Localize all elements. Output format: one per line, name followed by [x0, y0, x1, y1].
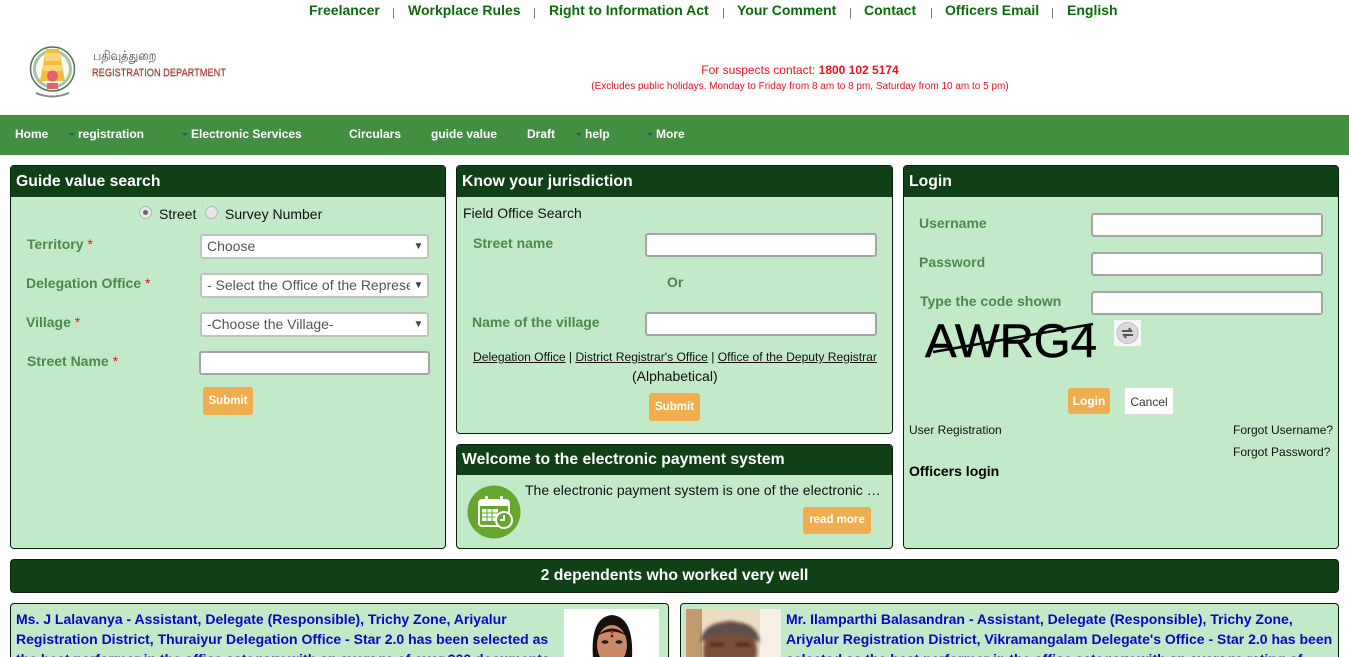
- heading: electronic payment: [457, 445, 892, 475]
- navigation bar: registration: [78, 127, 144, 141]
- top links: [309, 2, 1118, 19]
- text: performer two: Ariyalur Registration District, Vikramangalam Delegate's Office - Star 2.0 has been: [786, 631, 1332, 647]
- panel: electronic payment: The electronic payment system is one of the electronic …: [525, 482, 881, 498]
- button: login: [1068, 388, 1110, 414]
- icon: calendar: [468, 486, 520, 538]
- text: performer two: [786, 611, 1332, 657]
- top links: Officers Email: [945, 2, 1039, 18]
- navigation bar: Draft: [527, 127, 555, 141]
- top links: English: [1067, 2, 1118, 18]
- button: read more: [803, 507, 871, 534]
- radio: street: [139, 206, 152, 219]
- select: delegation office: ▼: [414, 280, 423, 291]
- panel: know your jurisdiction: (Alphabetical): [632, 368, 718, 384]
- top links: |: [849, 7, 852, 19]
- navigation bar: More: [656, 127, 685, 141]
- panel: guide value search: Street Name *: [27, 353, 118, 369]
- panel: guide value search: Survey Number: [225, 206, 322, 222]
- input: street name: [199, 351, 430, 375]
- panel: login: User Registration: [909, 423, 1002, 437]
- panel: login: Forgot Username?: [1233, 423, 1333, 437]
- panel: login: Password: [919, 254, 985, 270]
- button: submit: [203, 387, 253, 415]
- heading: guide value search: Guide value search: [16, 173, 160, 190]
- top links: |: [533, 7, 536, 19]
- button: read more: read more: [809, 514, 865, 526]
- photo: performer one: [564, 609, 659, 657]
- panel: know your jurisdiction: Name of the village: [472, 314, 600, 330]
- panel: performer two: [680, 603, 1339, 657]
- select: territory: [200, 234, 429, 259]
- button: submit: [649, 393, 700, 421]
- heading: know your jurisdiction: Know your jurisdiction: [462, 173, 633, 190]
- top links: Workplace Rules: [408, 2, 521, 18]
- banner: dependents heading: 2 dependents who worked very well: [541, 567, 808, 584]
- top links: Contact: [864, 2, 916, 18]
- panel: know your jurisdiction: [456, 165, 893, 434]
- input: village name: [645, 312, 877, 336]
- panel: know your jurisdiction: Or: [667, 274, 683, 290]
- helpline contact: [591, 63, 1009, 92]
- select: village: -Choose the Village-: [207, 316, 334, 332]
- panel: login: Forgot Password?: [1233, 445, 1330, 459]
- panel: know your jurisdiction: Field Office Search: [463, 205, 582, 221]
- select: delegation office: [200, 273, 429, 298]
- top links: |: [930, 7, 933, 19]
- text: performer one: Ms. J Lalavanya - Assistant, Delegate (Responsible), Trichy Zone, Ariyalur: [16, 611, 507, 627]
- input: password: [1091, 252, 1323, 276]
- panel: login: Username: [919, 215, 987, 231]
- navigation bar: help: [585, 127, 610, 141]
- panel: electronic payment: [456, 444, 893, 549]
- top links: |: [1051, 7, 1054, 19]
- select: territory: Choose: [207, 238, 255, 254]
- top links: |: [392, 7, 395, 19]
- heading: login: [904, 166, 1338, 197]
- select: village: [200, 312, 429, 337]
- navigation bar: [0, 115, 1349, 155]
- button: submit: Submit: [208, 395, 247, 407]
- top links: Freelancer: [309, 2, 380, 18]
- panel: guide value search: [10, 165, 446, 549]
- panel: login: Officers login: [909, 463, 999, 479]
- button: cancel: [1124, 387, 1174, 415]
- top links: Right to Information Act: [549, 2, 709, 18]
- panel: guide value search: Territory *: [27, 236, 93, 252]
- select: village: ▼: [414, 319, 423, 330]
- input: street name: [645, 233, 877, 257]
- text: performer two: Mr. Ilamparthi Balasandran - Assistant, Delegate (Responsible), Trichy Zone,: [786, 611, 1293, 627]
- button: cancel: Cancel: [1130, 395, 1168, 409]
- panel: know your jurisdiction: Street name: [473, 235, 553, 251]
- helpline contact: (Excludes public holidays. Monday to Friday from 8 am to 8 pm, Saturday from 10 am to 5 pm): [591, 81, 1009, 92]
- logo emblem: [30, 46, 76, 98]
- select: territory: ▼: [414, 241, 423, 252]
- panel: login: Type the code shown: [920, 293, 1061, 309]
- panel: guide value search: Street: [159, 206, 196, 222]
- navigation bar: Home: [15, 127, 48, 141]
- photo: performer two: [686, 609, 781, 657]
- panel: performer one: [10, 603, 669, 657]
- logo department name: பதிவுத்துறை: [93, 49, 156, 64]
- heading: guide value search: [11, 166, 445, 197]
- text: performer one: Registration District, Thuraiyur Delegation Office - Star 2.0 has been selected as: [16, 631, 548, 647]
- office links: Delegation Office | District Registrar's Office | Office of the Deputy Registrar: [473, 350, 877, 364]
- top links: |: [722, 7, 725, 19]
- button: submit: Submit: [655, 401, 694, 413]
- navigation bar: Electronic Services: [191, 127, 302, 141]
- radio: survey number: [205, 206, 218, 219]
- panel: login: [903, 165, 1339, 549]
- heading: login: Login: [909, 173, 952, 190]
- input: username: [1091, 213, 1323, 237]
- text: performer one: [16, 611, 550, 657]
- panel: guide value search: Village *: [26, 314, 80, 330]
- heading: know your jurisdiction: [457, 166, 892, 197]
- button: login: Login: [1073, 394, 1105, 408]
- navigation bar: Circulars: [349, 127, 401, 141]
- icon: refresh captcha: [1114, 320, 1141, 346]
- input: captcha: [1091, 291, 1323, 315]
- heading: electronic payment: Welcome to the electronic payment system: [462, 451, 785, 468]
- logo department name: [92, 49, 226, 79]
- banner: dependents heading: [10, 559, 1339, 593]
- panel: guide value search: Delegation Office *: [26, 275, 150, 291]
- top links: Your Comment: [737, 2, 836, 18]
- logo department name: REGISTRATION DEPARTMENT: [92, 67, 226, 79]
- helpline contact: For suspects contact: 1800 102 5174: [701, 63, 899, 77]
- navigation bar: guide value: [431, 127, 497, 141]
